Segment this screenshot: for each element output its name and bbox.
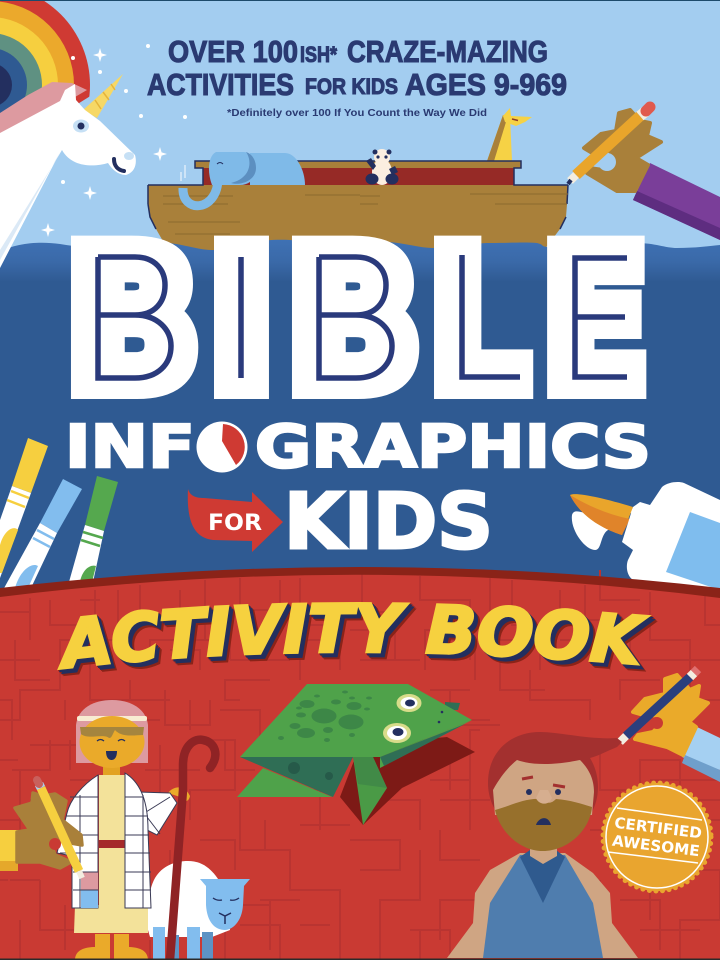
hand with pencil: top right [568,107,720,240]
title: BIBLE: B [286,208,422,434]
title: BIBLE [65,208,649,434]
elephant [181,152,305,206]
title: KIDS: KIDS [284,478,493,567]
origami frog [237,684,475,825]
shepherd [57,700,190,960]
ark [148,161,568,262]
crayon: green [69,476,118,582]
crayon: yellow [0,438,48,578]
heading lines: CRAZE-MAZING [347,34,548,69]
heading lines: FOR KIDS [305,74,398,99]
title: BIBLE: I [208,209,275,434]
heading lines: ACTIVITIES [147,67,294,102]
pink mane [0,82,87,140]
red maze section [0,567,720,960]
unicorn [0,74,136,268]
title: BIBLE: B [65,208,201,434]
BIBLE inline stroke [98,255,627,378]
glue bottle [570,482,720,590]
water [0,240,720,600]
title: ACTIVITY BOOK: ACTIVITY BOOK [57,602,658,676]
giraffe [487,108,532,161]
sparkles and stars [41,44,187,237]
hand with blue pencil: top right of maze [620,669,720,782]
title: INFOGRAPHICS: GRAPHICS [255,412,651,481]
sheep [147,861,250,960]
pie chart O [196,422,248,472]
bottom edge line [0,958,720,960]
man with beard [447,732,638,958]
heading lines: OVER 100 [168,34,298,69]
heading lines: ISH* [300,42,337,67]
title: BIBLE: E [542,208,649,434]
heading lines: AGES 9-969 [405,67,567,102]
badge: certified awesome: CERTIFIED [613,814,703,842]
badge: certified awesome [603,783,711,891]
title: INFOGRAPHICS: INF [65,412,195,481]
footnote: *Definitely over 100 If You Count the Way We Did [227,107,487,119]
FOR arrow [188,489,283,552]
sky background [0,0,720,600]
hand with yellow pencil: left [0,780,82,878]
heading lines [147,34,567,102]
title: INFOGRAPHICS [65,412,651,481]
crayon: blue [3,479,82,590]
shepherd staff [170,740,215,960]
panda [366,149,398,185]
FOR arrow: FOR [208,511,262,536]
title: INFOGRAPHICS: O [199,412,245,481]
title: BIBLE: L [428,208,529,434]
top edge line [0,0,720,1]
badge: certified awesome: AWESOME [611,832,701,860]
rainbow [0,1,90,113]
